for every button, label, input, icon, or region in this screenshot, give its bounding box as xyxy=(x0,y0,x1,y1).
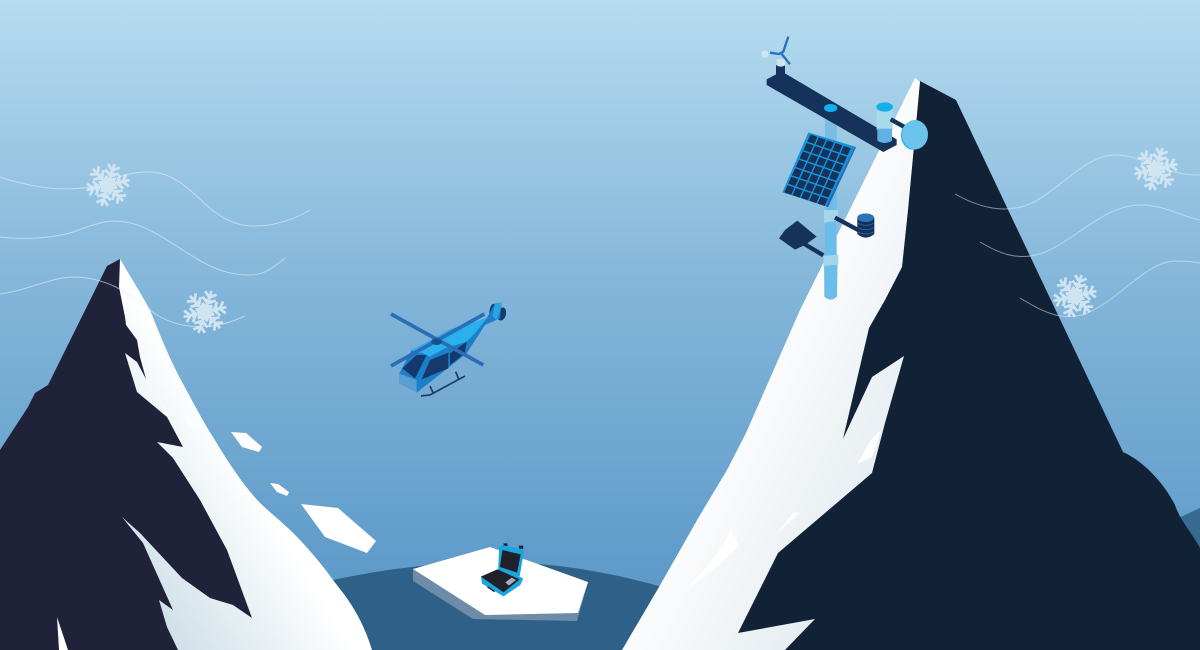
helicopter: body xyxy=(399,303,502,393)
station: lower mast xyxy=(824,217,838,300)
left mountain: rock xyxy=(0,259,260,650)
wind lines: left xyxy=(0,172,310,327)
snowflake: upper right xyxy=(1128,141,1184,197)
helicopter: tail fin xyxy=(492,303,502,320)
station: collars xyxy=(823,210,838,266)
station: rain gauge xyxy=(876,102,893,143)
ice floe with case xyxy=(413,543,588,621)
left mountain: highlights on snow xyxy=(162,405,202,431)
helicopter: nose xyxy=(399,373,417,393)
station: dish sensor xyxy=(891,119,928,150)
helicopter: skids xyxy=(421,372,465,396)
station: crossarm xyxy=(767,65,897,152)
helicopter: rotor hub xyxy=(431,338,442,345)
snowflake: lower right xyxy=(1047,268,1103,324)
ice fragment: tiny xyxy=(270,483,289,496)
station: upper mast xyxy=(825,108,837,218)
helicopter: roof and boom highlight xyxy=(412,318,487,357)
snowflake: upper left xyxy=(80,157,136,213)
ice floe: side xyxy=(413,569,588,621)
station: shovel sensor xyxy=(779,221,823,255)
distant hill: central xyxy=(320,562,662,650)
equipment case xyxy=(481,543,524,596)
helicopter: main rotor xyxy=(391,314,484,366)
snowflake: near left peak xyxy=(177,284,233,340)
helicopter xyxy=(391,303,508,396)
station: solar panel xyxy=(782,132,856,207)
station: mast cap xyxy=(824,104,837,112)
station: anemometer xyxy=(761,37,790,67)
ice fragment: large xyxy=(301,504,376,553)
station: cylinder sensor xyxy=(835,213,874,238)
left mountain: snow sliver at the foot xyxy=(57,617,68,650)
helicopter: tail rotor xyxy=(488,303,508,322)
right mountain: rock xyxy=(730,81,1200,650)
ice floe: top xyxy=(413,547,588,615)
ice fragment: small upper xyxy=(231,432,262,452)
helicopter: windows xyxy=(402,342,467,379)
distant hill: right xyxy=(1170,508,1200,600)
right mountain: snow xyxy=(622,78,920,650)
wind lines: right xyxy=(955,155,1200,317)
left mountain: snow xyxy=(119,259,372,650)
right mountain: highlights on snow xyxy=(687,430,881,588)
weather station xyxy=(761,37,928,300)
